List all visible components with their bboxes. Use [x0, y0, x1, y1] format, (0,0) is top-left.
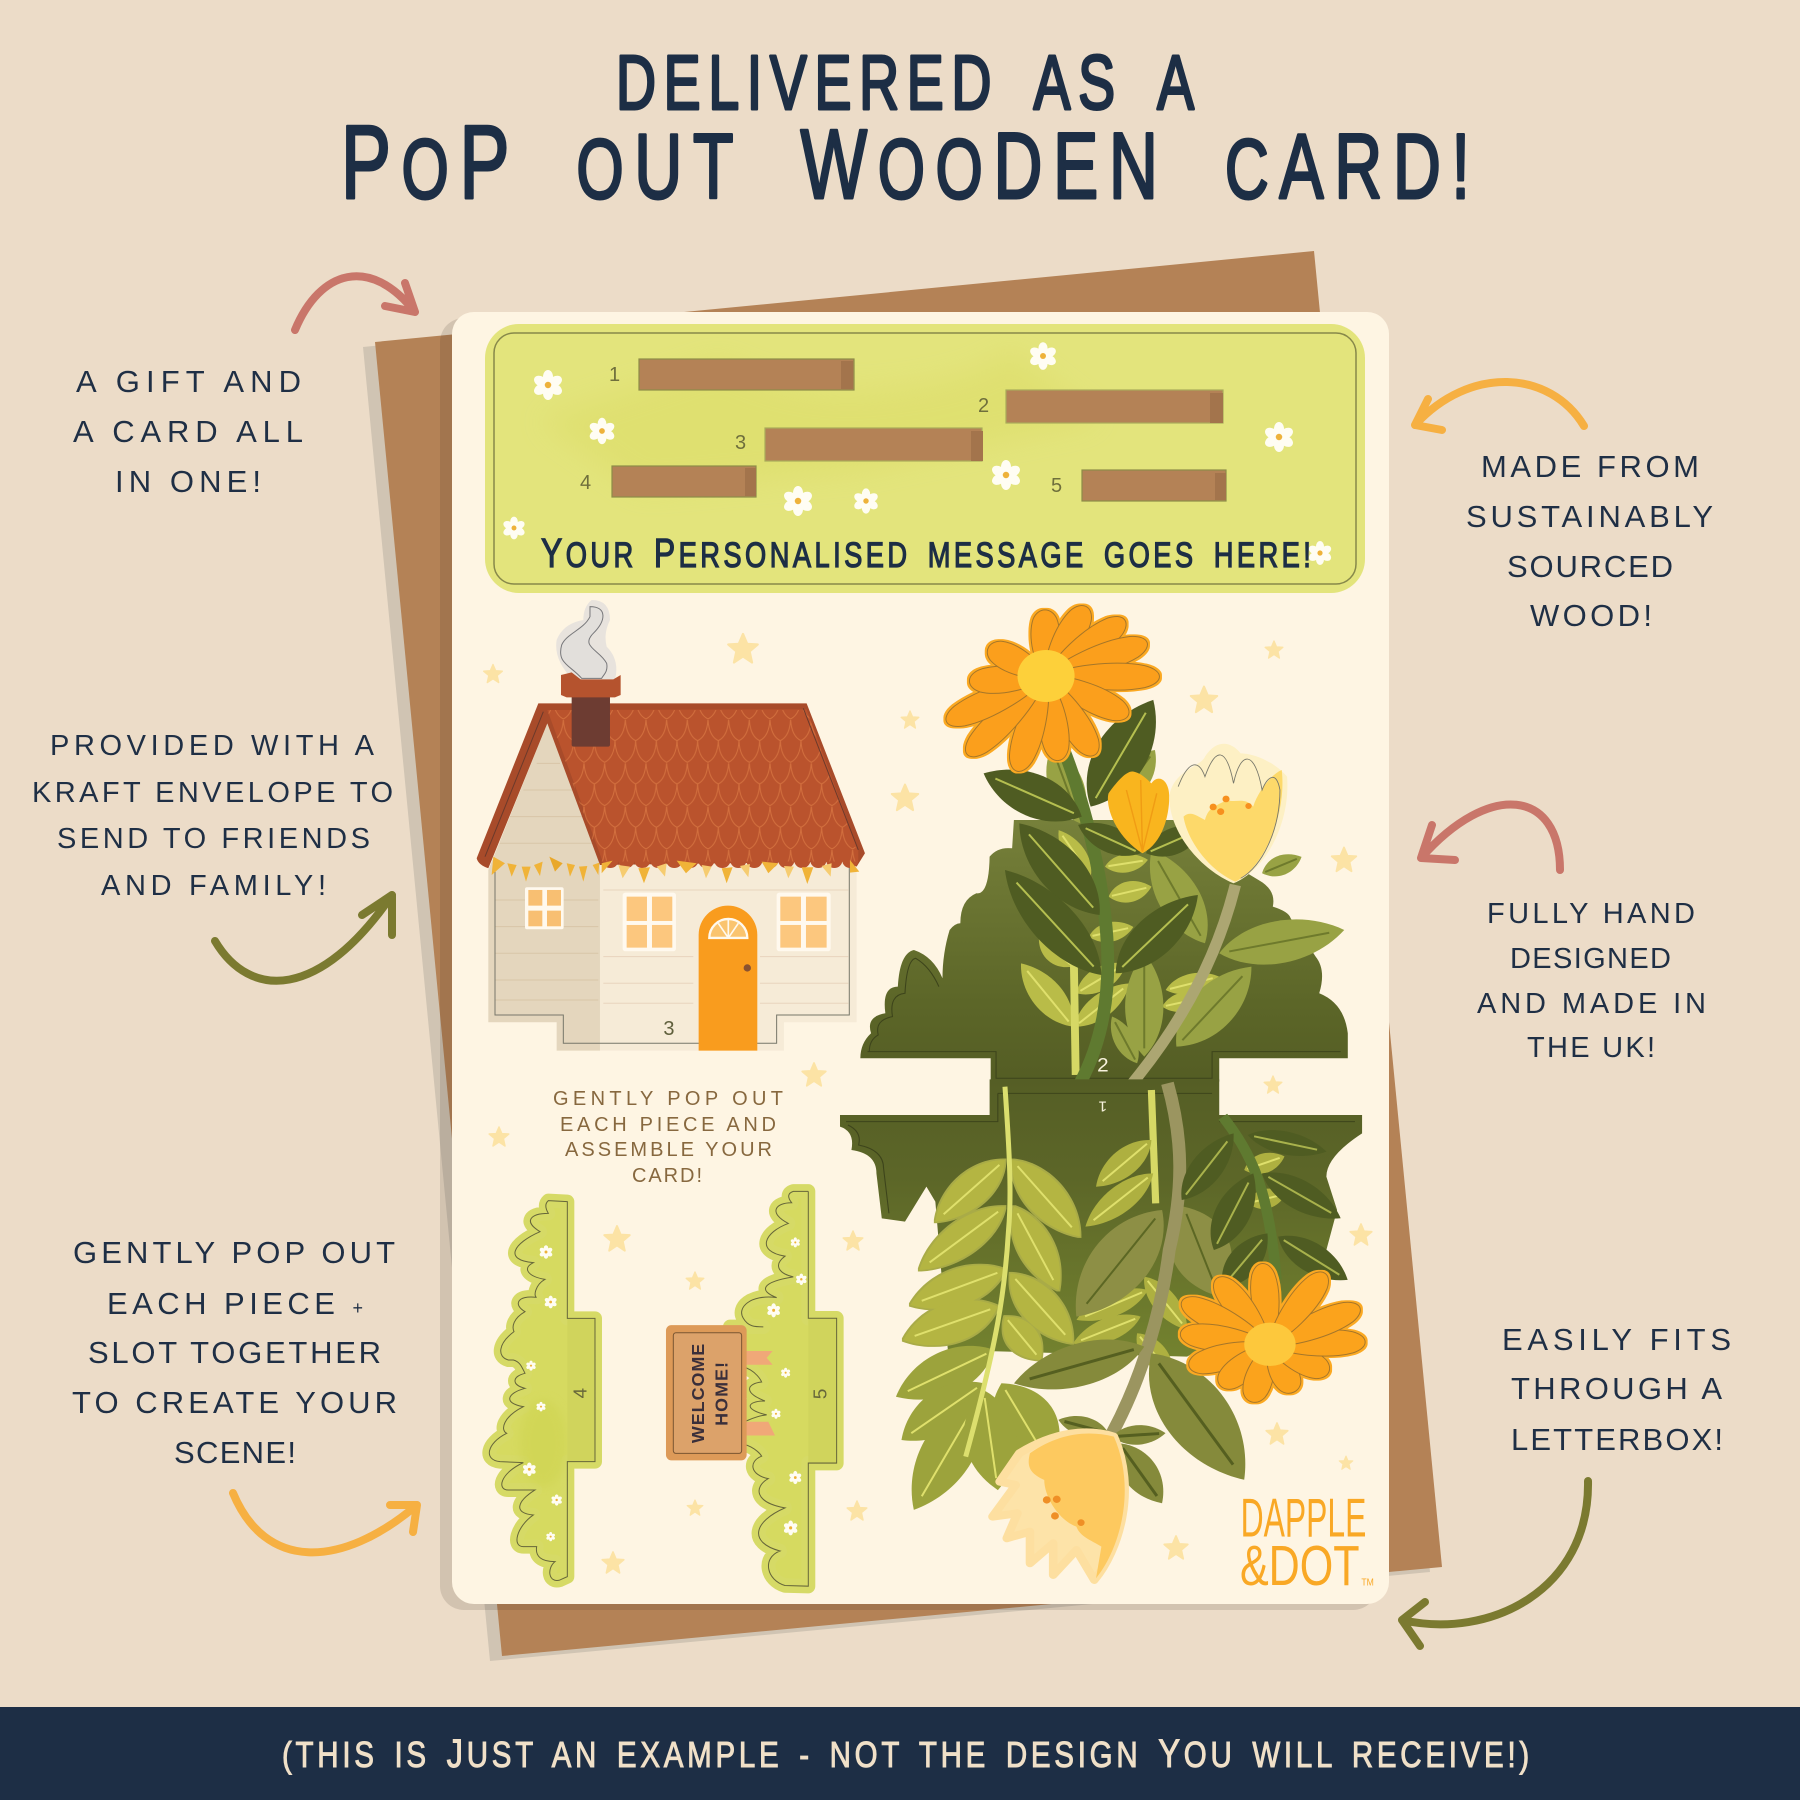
tan stem	[1132, 885, 1235, 1084]
pale fern leaves	[1009, 825, 1222, 1036]
title line 1: DELIVERED AS A	[616, 40, 1194, 126]
dark green backdrop	[860, 820, 1348, 1082]
logo: &DOT	[1240, 1535, 1360, 1597]
ribbons	[743, 1351, 775, 1435]
footer bar	[0, 1707, 1800, 1800]
callout: hand designed: FULLY HAND	[1487, 898, 1695, 930]
main fern stem	[966, 1087, 1010, 1457]
callout: sustainable wood: WOOD!	[1530, 598, 1652, 633]
callout: hand designed: AND MADE IN	[1477, 988, 1706, 1020]
callout: letterbox: THROUGH A	[1511, 1371, 1722, 1406]
daisy centre	[1017, 650, 1075, 702]
callout: kraft envelope: SEND TO FRIENDS	[57, 823, 370, 855]
footer note: (THIS IS JUST AN EXAMPLE - NOT THE DESIGN YOU WILL RECEIVE!)	[282, 1731, 1529, 1776]
lower bouquet piece	[840, 1079, 1374, 1597]
callout: hand designed: DESIGNED	[1510, 943, 1671, 975]
window middle	[623, 893, 676, 951]
instruction text: ASSEMBLE YOUR	[565, 1139, 772, 1161]
house piece	[477, 600, 865, 1051]
big orange daisy	[940, 600, 1159, 775]
window right	[777, 893, 831, 951]
second fern leaves	[1068, 1130, 1288, 1383]
logo	[1240, 1487, 1374, 1597]
callout: pop out pieces: GENTLY POP OUT	[73, 1235, 395, 1270]
olive leaves	[1035, 741, 1349, 1068]
lower fern leaves	[886, 1331, 1079, 1522]
wooden card	[452, 312, 1389, 1604]
olive leaves front	[1007, 1326, 1271, 1512]
arrow: gift	[295, 276, 415, 330]
arrow: sustainable	[1415, 382, 1584, 430]
callout: sustainable wood: SOURCED	[1507, 549, 1673, 584]
slot numbers: 5	[1051, 475, 1062, 497]
slot numbers: 2	[978, 395, 989, 417]
piece number 2: 2	[1097, 1055, 1109, 1076]
fern stem	[1074, 963, 1076, 1075]
arrow: hand designed	[1421, 804, 1560, 870]
callout: pop out pieces: SCENE!	[174, 1435, 296, 1470]
front wall	[600, 860, 857, 1051]
callout: pop out pieces: EACH PIECE +	[107, 1286, 363, 1321]
callout: letterbox: EASILY FITS	[1502, 1322, 1731, 1357]
slot 1	[639, 359, 854, 390]
bush daisies	[766, 1237, 807, 1535]
callout: gift and card: IN ONE!	[115, 464, 261, 499]
callout: pop out pieces: TO CREATE YOUR	[72, 1385, 397, 1420]
smoke	[556, 600, 616, 680]
kraft envelope	[375, 251, 1442, 1656]
upper bouquet piece	[860, 600, 1349, 1084]
logo: DAPPLE	[1241, 1487, 1366, 1549]
slot numbers: 3	[735, 432, 746, 454]
instruction text: GENTLY POP OUT	[553, 1088, 783, 1110]
arrow: pieces	[233, 1493, 417, 1552]
instruction text: CARD!	[632, 1165, 702, 1187]
bush piece 5 with sign	[666, 1191, 837, 1586]
slot numbers	[580, 364, 1062, 497]
slot 2	[1006, 390, 1223, 423]
chimney	[561, 672, 621, 747]
title	[341, 40, 1470, 221]
slot numbers: 1	[609, 364, 620, 386]
callout: kraft envelope: PROVIDED WITH A	[50, 730, 375, 762]
piece number 1: 1	[1098, 1098, 1107, 1114]
wooden sign: WELCOME	[688, 1344, 708, 1443]
callout: sustainable wood	[1466, 449, 1713, 633]
tan stem	[1112, 1083, 1180, 1433]
cream tulip	[1169, 744, 1287, 883]
title line 2: POP OUT WOODEN CARD!	[341, 105, 1470, 221]
callout: kraft envelope: AND FAMILY!	[101, 870, 326, 902]
piece number 4: 4	[570, 1388, 591, 1398]
arrow: envelope	[215, 895, 392, 981]
slot numbers: 4	[580, 472, 591, 494]
right sprig stem	[1223, 1117, 1276, 1280]
instruction text	[553, 1088, 783, 1187]
window left	[525, 887, 564, 929]
dark leaves	[974, 688, 1213, 989]
roof	[477, 703, 865, 868]
olive leaves behind	[1053, 1193, 1247, 1333]
daisy centre	[1244, 1323, 1296, 1366]
callout: sustainable wood: MADE FROM	[1481, 449, 1699, 484]
callout: kraft envelope: KRAFT ENVELOPE TO	[32, 777, 393, 809]
callout: gift and card: A CARD ALL	[73, 414, 303, 449]
hanging tulip	[992, 1432, 1125, 1580]
arrow: letterbox	[1402, 1481, 1588, 1646]
stars	[484, 634, 1372, 1573]
main fern leaves	[896, 1148, 1095, 1369]
callout: letterbox: LETTERBOX!	[1511, 1422, 1723, 1457]
piece number 3: 3	[663, 1018, 674, 1040]
callout: gift and card: A GIFT AND	[76, 364, 301, 399]
bunting	[492, 857, 859, 884]
orange tulip	[1108, 772, 1169, 853]
bush piece 4	[489, 1201, 595, 1580]
card shadow	[440, 318, 1377, 1610]
callout: hand designed	[1477, 898, 1706, 1064]
orange daisy	[1175, 1262, 1366, 1406]
fern stem right	[1151, 1090, 1156, 1203]
logo: TM	[1361, 1578, 1374, 1589]
callout: hand designed: THE UK!	[1527, 1032, 1655, 1064]
envelope shadow	[363, 256, 1430, 1661]
wooden sign	[666, 1325, 747, 1460]
slot 5	[1082, 470, 1226, 501]
callout: kraft envelope	[32, 730, 393, 902]
dark green backdrop	[840, 1079, 1362, 1357]
door	[699, 906, 757, 1051]
bush daisies	[522, 1245, 563, 1541]
wooden sign: HOME!	[712, 1362, 731, 1426]
callout: pop out pieces: SLOT TOGETHER	[88, 1335, 381, 1370]
piece number 5: 5	[811, 1389, 832, 1399]
daisies	[502, 342, 1333, 565]
slot 3	[765, 428, 983, 461]
gable wall	[488, 723, 600, 1051]
instruction text: EACH PIECE AND	[560, 1114, 776, 1136]
callout: pop out pieces	[72, 1235, 397, 1470]
dark sprig leaves	[1169, 1124, 1356, 1296]
green stem	[1057, 733, 1108, 1083]
slot 4	[612, 466, 756, 497]
callout: gift and card	[73, 364, 303, 499]
callout: letterbox	[1502, 1322, 1731, 1457]
personalised message: YOUR PERSONALISED MESSAGE GOES HERE!	[541, 530, 1311, 576]
panel: message strip	[485, 324, 1365, 593]
callout: sustainable wood: SUSTAINABLY	[1466, 499, 1713, 534]
